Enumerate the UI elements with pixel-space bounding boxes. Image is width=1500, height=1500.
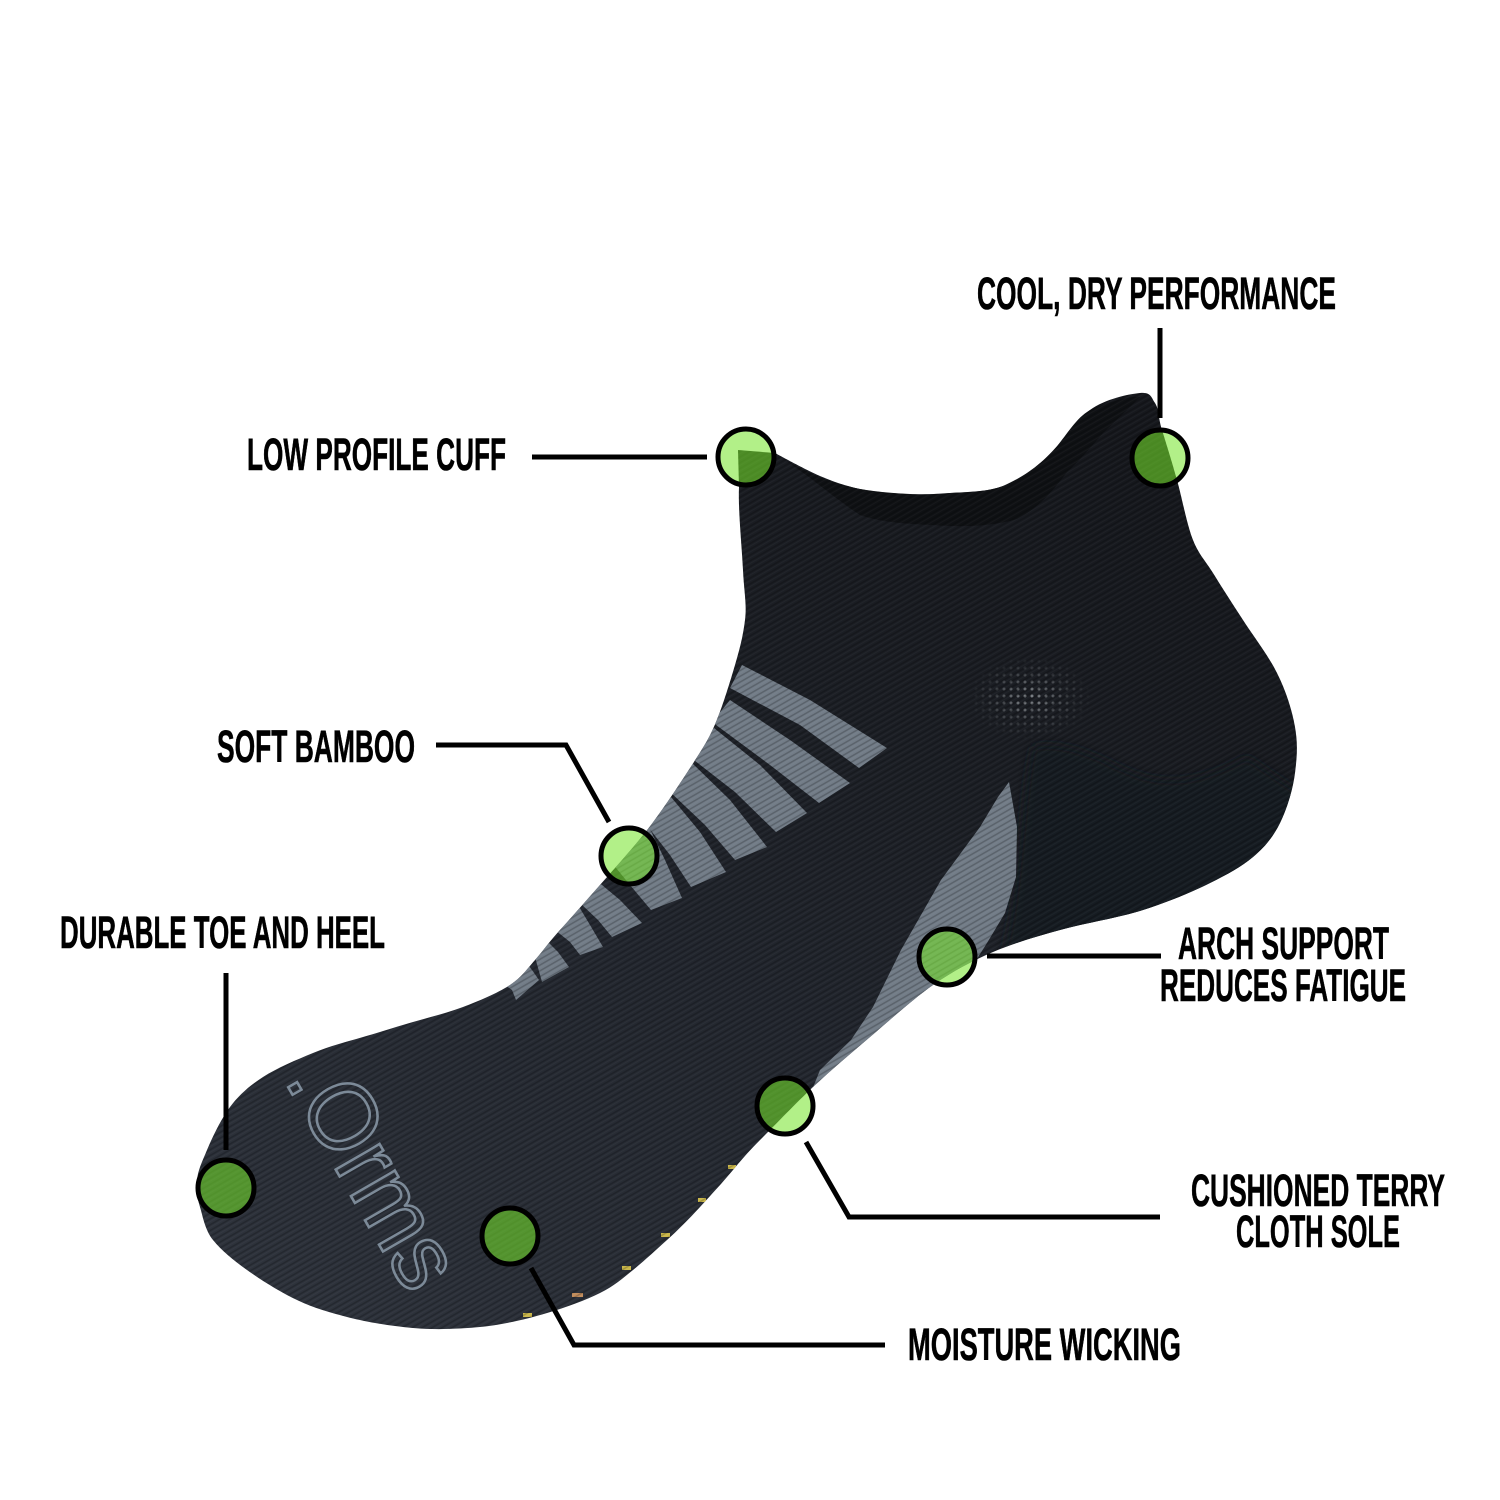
label text — [1191, 1165, 1445, 1257]
leader line — [1158, 328, 1162, 418]
sole yellow ticks — [523, 1165, 736, 1317]
marker: cushioned sole — [757, 1078, 813, 1134]
leader line — [436, 745, 609, 822]
arch support panel — [810, 782, 1017, 1095]
sock body — [197, 393, 1297, 1329]
label text: MOISTURE WICKING — [908, 1319, 1181, 1370]
marker: low profile cuff — [718, 429, 774, 485]
toe logo text: .Orms — [266, 1037, 483, 1307]
label: arch support reduces fatigue — [987, 918, 1406, 1011]
sock illustration — [180, 380, 1310, 1340]
leader line — [224, 973, 228, 1150]
leader line — [987, 954, 1161, 958]
marker: arch support — [919, 929, 975, 985]
heel cushion shading — [180, 380, 1310, 1340]
leader line — [532, 454, 707, 460]
callout markers — [198, 429, 1188, 1264]
label: cushioned terry cloth sole — [806, 1142, 1445, 1257]
heel cushion patch — [998, 769, 1294, 950]
label: moisture wicking — [531, 1268, 1181, 1370]
marker: soft bamboo — [601, 828, 657, 884]
label text: SOFT BAMBOO — [217, 721, 415, 772]
sock inner collar — [780, 397, 1140, 526]
marker: moisture wicking — [482, 1208, 538, 1264]
label text: LOW PROFILE CUFF — [247, 429, 506, 480]
marker: cool dry performance — [1132, 430, 1188, 486]
infographic canvas — [62, 277, 1445, 1361]
label text: DURABLE TOE AND HEEL — [60, 907, 385, 958]
knit texture — [180, 380, 1310, 1340]
gray band stripes — [505, 665, 887, 1000]
label text — [1160, 918, 1406, 1011]
mesh panel — [974, 660, 1082, 732]
label: soft bamboo — [217, 721, 609, 822]
marker: durable toe — [198, 1160, 254, 1216]
leader line — [531, 1268, 885, 1345]
leader line — [806, 1142, 1160, 1217]
